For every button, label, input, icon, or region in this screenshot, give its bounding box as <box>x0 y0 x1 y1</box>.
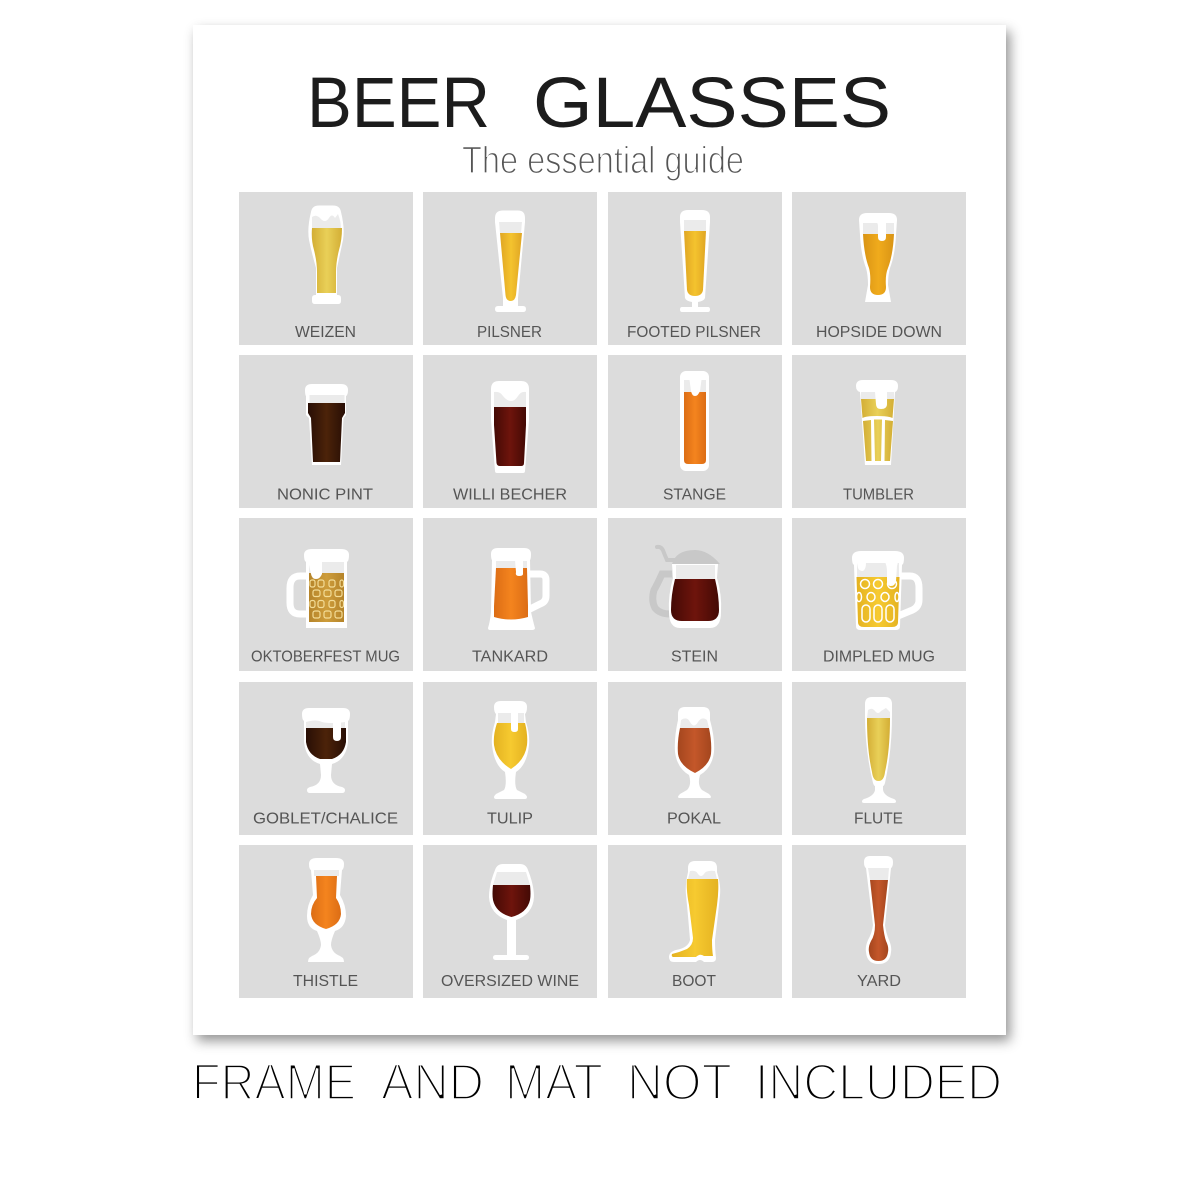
label: thistle: THISTLE <box>293 973 358 990</box>
panel: dimpled mug <box>792 518 966 671</box>
icon: weizen glass <box>308 206 344 304</box>
panel: stein <box>608 518 782 671</box>
label: stein: STEIN <box>671 648 718 666</box>
panel: pilsner <box>423 192 597 345</box>
panel: boot <box>608 845 782 998</box>
icon: footed pilsner glass <box>680 210 710 312</box>
footer note: AND <box>381 1054 484 1110</box>
label: hopside down: HOPSIDE DOWN <box>816 324 942 341</box>
title: GLASSES <box>533 64 891 143</box>
panel: pokal <box>608 682 782 835</box>
label: oktoberfest mug: OKTOBERFEST MUG <box>251 648 400 666</box>
icon: stange glass <box>680 371 709 471</box>
panel: tumbler <box>792 355 966 508</box>
label: pokal: POKAL <box>667 810 721 828</box>
label: boot: BOOT <box>672 973 717 990</box>
label: oversized wine: OVERSIZED WINE <box>441 973 579 990</box>
subtitle: The essential guide <box>462 139 744 181</box>
icon: dimpled mug <box>852 551 919 630</box>
panel: nonic pint <box>239 355 413 508</box>
panel: flute <box>792 682 966 835</box>
icon: boot glass <box>669 861 720 962</box>
label: dimpled mug: DIMPLED MUG <box>823 648 935 666</box>
title <box>307 64 891 143</box>
title: BEER <box>307 64 490 143</box>
label: footed pilsner: FOOTED PILSNER <box>627 324 761 341</box>
panel: footed pilsner <box>608 192 782 345</box>
label: willi becher: WILLI BECHER <box>453 486 567 504</box>
icon: yard glass <box>864 856 893 964</box>
icon: goblet <box>302 708 350 793</box>
panel: hopside down <box>792 192 966 345</box>
panel: willi becher <box>423 355 597 508</box>
poster panel <box>193 25 1006 1035</box>
icon: tulip glass <box>492 701 529 799</box>
panel: thistle <box>239 845 413 998</box>
label: pilsner: PILSNER <box>477 324 542 341</box>
icon: pokal glass <box>675 707 714 798</box>
panel: oktoberfest mug <box>239 518 413 671</box>
panel: tankard <box>423 518 597 671</box>
label: yard: YARD <box>857 973 901 990</box>
footer note: INCLUDED <box>755 1054 1002 1110</box>
icon: hopside down glass <box>859 213 897 302</box>
icon: pilsner glass <box>495 210 526 312</box>
icon: willi becher glass <box>491 381 529 473</box>
label: flute: FLUTE <box>854 810 903 828</box>
label: tulip: TULIP <box>487 810 533 828</box>
icon: oktoberfest mug <box>290 549 349 628</box>
label: tankard: TANKARD <box>472 648 548 666</box>
label: weizen: WEIZEN <box>295 324 356 341</box>
label: goblet/chalice: GOBLET/CHALICE <box>253 810 398 828</box>
panel: yard <box>792 845 966 998</box>
icon: tankard <box>488 548 546 630</box>
panel: goblet/chalice <box>239 682 413 835</box>
panel: weizen <box>239 192 413 345</box>
panel: stange <box>608 355 782 508</box>
icon: flute glass <box>862 697 896 803</box>
panel: tulip <box>423 682 597 835</box>
label: tumbler: TUMBLER <box>843 486 914 504</box>
footer note: MAT <box>505 1054 603 1110</box>
panel: oversized wine <box>423 845 597 998</box>
footer note: FRAME <box>192 1054 356 1110</box>
icon: thistle glass <box>307 858 346 962</box>
icon: nonic pint glass <box>305 384 348 465</box>
label: nonic pint: NONIC PINT <box>277 486 374 504</box>
icon: tumbler glass <box>856 380 898 465</box>
icon: stein <box>653 547 721 628</box>
footer note <box>192 1054 1002 1110</box>
label: stange: STANGE <box>663 486 726 504</box>
footer note: NOT <box>627 1054 732 1110</box>
icon: oversized wine glass <box>489 864 534 960</box>
